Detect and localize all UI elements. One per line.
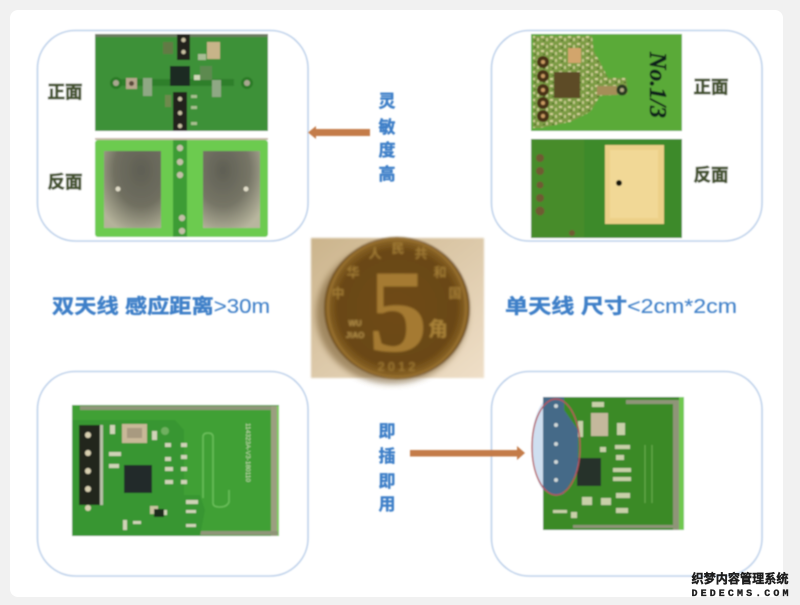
photo: dual antenna board back [95,138,268,237]
label: back: 反面 [694,165,728,185]
coin inscription [331,241,462,301]
coin inscription: 共 [414,246,428,261]
heading: single antenna size: 单天线 尺寸 <2cm*2cm [505,295,737,318]
red ellipse highlight [532,402,543,490]
photo: single antenna board back [531,139,682,238]
coin inscription: 民 [391,241,405,256]
vertical text: plug and play: 用 [378,495,396,514]
photo: coin for size comparison [311,237,484,384]
shadow [316,244,468,384]
watermark [692,571,789,600]
coin inscription: 人 [368,246,382,261]
coin inscription: 中 [331,286,345,301]
photo: module with highlighted pins [532,397,684,530]
coin small mark: JIAO [346,331,364,340]
label: back: 反面 [48,172,82,192]
heading: dual antenna range: 双天线 感应距离 >30m [52,294,270,318]
vertical text: high sensitivity: 灵 [378,92,396,111]
board serial: 114323A-V3-180110 [244,423,251,482]
coin year: 2012 [378,359,418,374]
photo: dual antenna board front [95,34,268,131]
watermark: 织梦内容管理系统 [692,571,789,586]
vertical text: plug and play: 插 [378,447,396,466]
panel: single antenna board, front and back [492,30,762,241]
coin small mark [346,319,364,340]
vertical text: high sensitivity: 高 [378,164,396,184]
highlighted pin header [543,397,578,496]
coin inscription: 国 [448,286,462,301]
arrow: to plug-in module [410,446,525,460]
coin denomination: 5 [368,246,428,377]
vertical text: plug and play [378,422,396,514]
coin character: 角 [428,317,448,341]
arrow: to dual antenna panel [308,126,370,139]
label: front: 正面 [48,82,82,102]
panel: plug-in module photo [492,372,762,576]
coin inscription: 和 [433,265,447,280]
meander antenna [203,433,229,507]
panel: dual antenna board, front and back [38,30,308,241]
label: front: 正面 [694,77,728,97]
photo: module [72,405,279,536]
watermark: DEDECMS.COM [692,589,788,600]
vertical text: high sensitivity: 敏 [378,118,396,137]
coin body [324,237,470,379]
vertical text: high sensitivity [378,92,396,184]
photo: single antenna board front [531,34,682,131]
handwritten mark: No.1/3 [644,51,670,118]
panel: dual antenna module photo [38,372,308,576]
coin small mark: WU [348,319,362,328]
vertical text: plug and play: 即 [378,472,396,491]
vertical text: plug and play: 即 [378,422,396,441]
coin inscription: 华 [346,265,360,280]
vertical text: high sensitivity: 度 [378,141,396,160]
